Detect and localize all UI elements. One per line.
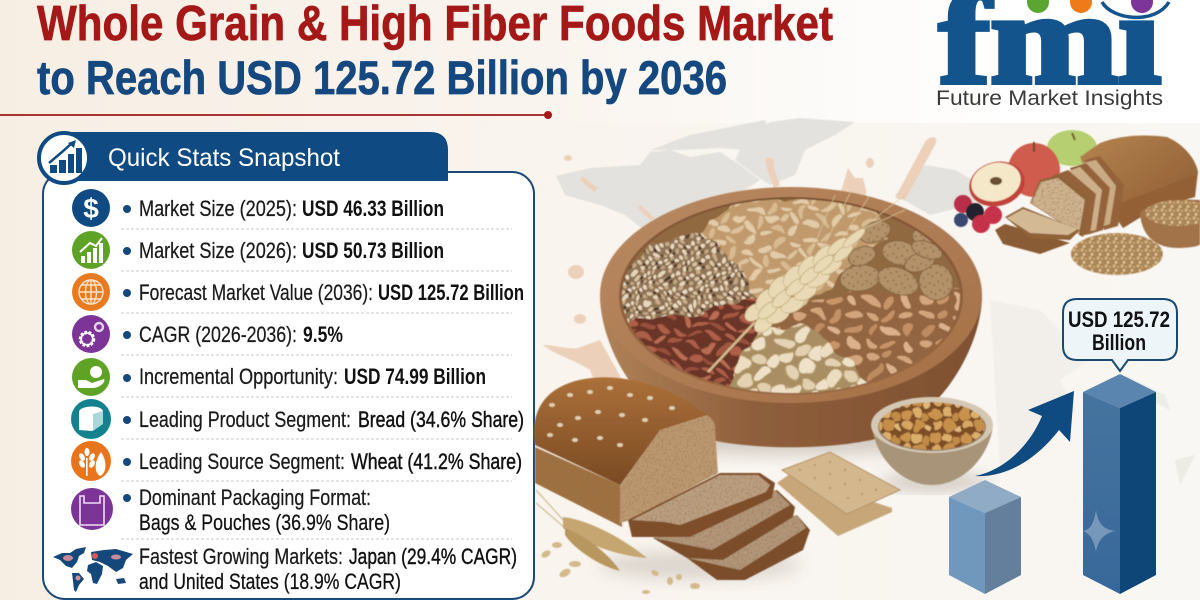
stat: leading product: Bread (34.6% Share) [358,407,524,432]
red rice [629,296,758,386]
stat: leading product: Leading Product Segment: [139,407,351,432]
stat: incremental opportunity: Incremental Opportunity: [139,364,338,389]
stat: CAGR [72,315,343,353]
stat: forecast value [72,273,524,311]
illustration: wheat stalks and scattered grains [536,490,700,594]
stat: CAGR: CAGR (2026-2036): [139,322,297,347]
stat: fastest growing markets: and United States (18.9% CAGR) [139,569,401,594]
stat: leading product [71,399,524,439]
slice 3 [687,515,810,580]
light rice [700,198,888,306]
stat: market size 2025: USD 46.33 Billion [302,196,444,221]
illustration: apples and berries [954,130,1097,233]
stat: incremental opportunity: USD 74.99 Billion [344,364,486,389]
stat: fastest growing markets [53,544,517,594]
flakes [838,217,956,303]
stat: packaging [71,485,390,535]
illustration: granola bowl [871,397,993,490]
stat: leading source: Wheat (41.2% Share) [351,449,522,474]
stat: forecast value: USD 125.72 Billion [378,280,524,305]
stat: market size 2026: USD 50.73 Billion [302,238,444,263]
stat: market size 2025 [72,189,444,227]
illustration: top bread loaf [995,135,1200,275]
bowl contents [621,198,961,394]
title [37,0,833,104]
oats [729,322,868,394]
stat: fastest growing markets: Fastest Growing Markets: [139,544,343,569]
stat: market size 2026: Market Size (2026): [139,238,297,263]
stat: CAGR: 9.5% [303,322,343,347]
wheat ear [708,193,905,372]
title: to Reach USD 125.72 Billion by 2036 [37,51,727,104]
callout: USD 125.72 Billion: Billion [1092,330,1146,355]
stat: leading source: Leading Source Segment: [139,449,345,474]
front slice [1030,175,1090,237]
stat: forecast value: Forecast Market Value (2036): [139,280,373,305]
stat: market size 2026 [72,231,444,269]
slice 2 [653,490,795,560]
large bar [1083,374,1156,594]
stat: fastest growing markets: Japan (29.4% CAGR) [349,544,517,569]
slice 1 [628,473,775,537]
quinoa [621,232,757,324]
panel: quick stats [39,132,534,599]
faded world map and splashes [543,118,1195,485]
stat: market size 2025: $ [83,193,99,224]
arrow [975,391,1074,476]
wheat berries [778,288,961,382]
row dividers [121,229,512,539]
illustration: grain bowl [600,185,982,454]
slice [1070,163,1110,234]
icon: world map [53,547,133,592]
stat: market size 2025: Market Size (2025): [139,196,297,221]
logo: Future Market Insights: Future Market Insights [936,87,1163,110]
small bar [949,480,1021,594]
slice [1085,156,1124,230]
panel header [39,132,448,183]
stat: leading source [71,441,522,481]
growth chart [949,299,1177,594]
stat: packaging: Bags & Pouches (36.9% Share) [139,510,390,535]
stat: incremental opportunity [72,358,486,396]
illustration: sliced bread loaf [534,377,810,580]
title rule [0,111,552,119]
illustration: crackers [777,452,900,536]
panel header: Quick Stats Snapshot [108,144,340,172]
callout: USD 125.72 Billion: USD 125.72 [1068,307,1170,332]
callout: USD 125.72 Billion [1063,299,1177,371]
stat: packaging: Dominant Packaging Format: [139,485,371,510]
slice [1052,170,1096,236]
